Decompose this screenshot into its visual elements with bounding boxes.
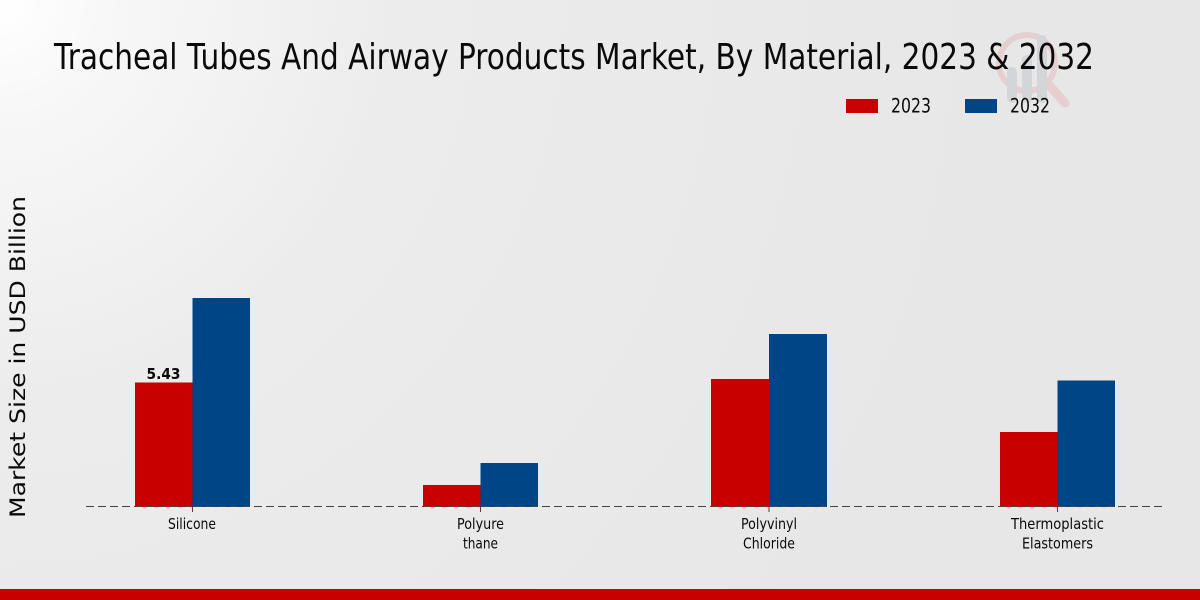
legend item: 2023: 2023 bbox=[891, 94, 931, 118]
legend bbox=[846, 94, 1050, 118]
x label: Polyurethane bbox=[457, 515, 504, 552]
x label: Polyvinyl Chloride bbox=[741, 515, 797, 552]
x axis baseline bbox=[86, 506, 1164, 508]
x label: Polyurethane: thane bbox=[463, 534, 498, 552]
data label: 5.43: 5.43 bbox=[146, 365, 180, 383]
x label: Polyvinyl Chloride: Polyvinyl bbox=[741, 515, 797, 533]
x label: Polyurethane: Polyure bbox=[457, 515, 504, 533]
legend item: 2032: 2032 bbox=[1010, 94, 1050, 118]
bars: Silicone bbox=[135, 298, 250, 507]
bars: Thermoplastic Elastomers bbox=[1000, 380, 1115, 507]
x label: Silicone: Silicone bbox=[168, 515, 216, 533]
x label: Polyvinyl Chloride: Chloride bbox=[743, 534, 795, 552]
bar chart bbox=[86, 298, 1164, 552]
y axis label: Market Size in USD Billion bbox=[6, 196, 31, 518]
x label: Thermoplastic Elastomers: Thermoplastic bbox=[1010, 515, 1104, 533]
legend item: 2032 bbox=[965, 94, 1050, 118]
x label: Thermoplastic Elastomers bbox=[1010, 515, 1104, 552]
bars: Polyurethane bbox=[423, 463, 538, 507]
legend item: 2023 bbox=[846, 94, 931, 118]
icon: watermark magnifier with bars bbox=[999, 35, 1065, 103]
footer bar bbox=[0, 589, 1200, 600]
bars: Polyvinyl Chloride bbox=[711, 334, 827, 507]
x label: Thermoplastic Elastomers: Elastomers bbox=[1022, 534, 1093, 552]
